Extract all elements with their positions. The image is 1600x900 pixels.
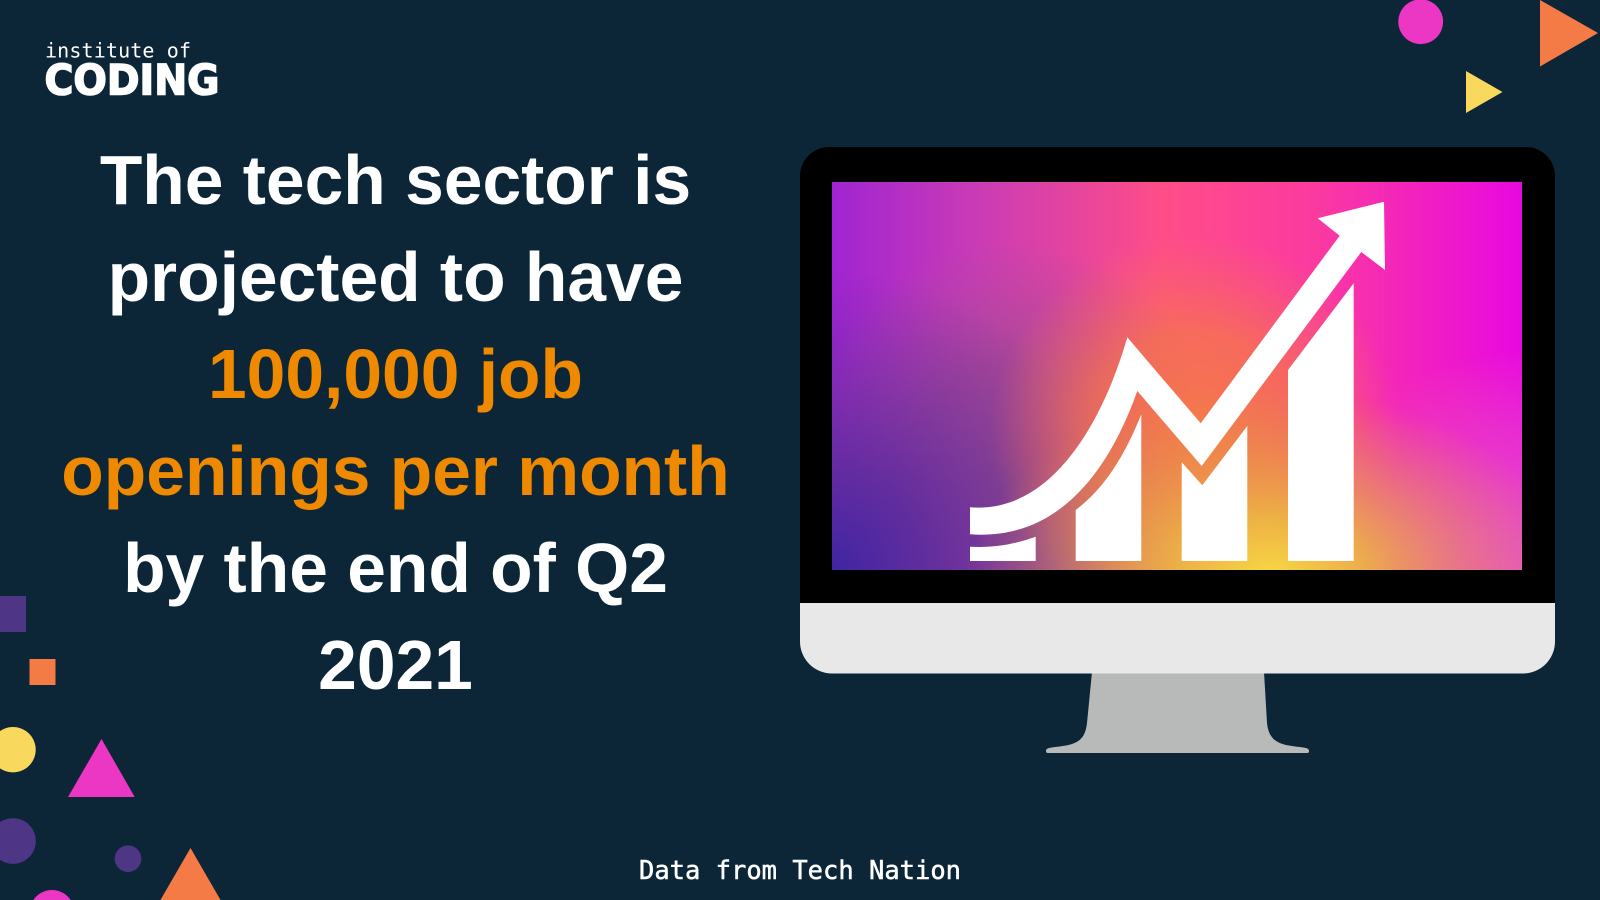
headline: 2021 [318, 626, 473, 704]
logo: institute of coding: CODING [44, 56, 220, 104]
source note: Data from Tech Nation [639, 856, 961, 886]
bar 3 [1182, 426, 1247, 561]
headline: 100,000 job [208, 335, 583, 413]
monitor bezel [800, 147, 1555, 603]
headline: The tech sector is [100, 141, 691, 219]
monitor [800, 147, 1555, 753]
monitor stand [1046, 672, 1309, 753]
bar 2 [1076, 414, 1141, 561]
headline: by the end of Q2 [123, 529, 668, 607]
monitor chin [800, 603, 1555, 674]
rising arrow [970, 202, 1385, 535]
headline: projected to have [108, 238, 683, 316]
headline: openings per month [61, 432, 730, 510]
bar 4 [1288, 283, 1354, 561]
bar 1 [970, 537, 1036, 561]
logo: institute of coding: institute of [45, 38, 191, 62]
icon: growth chart [970, 202, 1385, 561]
gradient screen [832, 182, 1522, 570]
headline [61, 141, 730, 704]
decorative shapes: bottom left [0, 596, 224, 900]
decorative shapes: top right [1398, 0, 1598, 113]
